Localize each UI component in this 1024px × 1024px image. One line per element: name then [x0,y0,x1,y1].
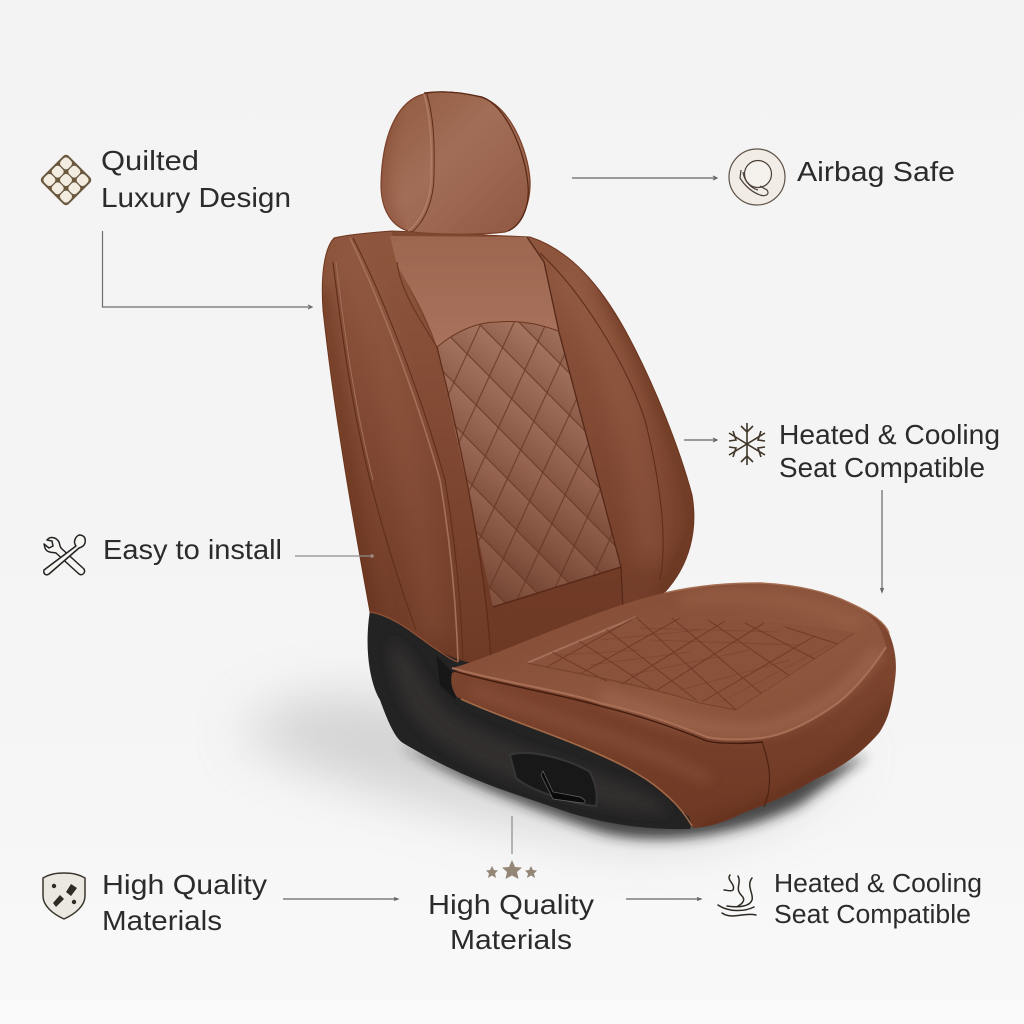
leader arrow [283,898,398,900]
icon: crossed tools [44,535,85,575]
diamond quilted back panel [437,321,620,608]
back stitching and piping [333,237,663,662]
seat adjustment lever [510,753,597,806]
callout: airbag safe [572,149,955,205]
label: Quilted [101,145,199,176]
callout: high quality materials centre [428,816,701,955]
vertical leader [511,816,513,854]
floor shadow [240,697,868,842]
icon: airbag [729,149,785,205]
leader arrow down [880,490,884,592]
centre panel [390,232,623,662]
icon: snowflake [729,423,765,465]
label: Luxury Design [101,182,291,213]
callout: easy to install [44,534,374,575]
leader arrow [572,176,717,180]
label [428,889,594,955]
cushion piping and seams [452,583,889,826]
icon: quilted diamond [39,153,93,207]
callout: high quality materials left [43,869,398,936]
leader line [102,231,312,309]
lower back hem over base [370,612,458,662]
cushion top surface [452,583,886,739]
label: High Quality [428,889,594,920]
label [102,869,267,936]
seat illustration [322,92,896,830]
label: Materials [102,905,222,936]
seat cushion [451,583,896,830]
label: High Quality [102,869,267,900]
infographic canvas [40,91,998,950]
callout: heated and cooling seat compatible [684,419,1000,592]
pointer line [295,554,374,558]
label: Heated & Cooling [774,870,982,898]
label: Heated & Cooling [779,419,1000,450]
leader arrow [684,438,717,442]
label: Seat Compatible [774,901,971,929]
headrest [381,92,530,235]
callout: quilted luxury design [39,145,312,309]
label [774,870,982,929]
label: Airbag Safe [797,156,955,187]
label: Easy to install [103,534,282,565]
black plastic seat base [368,605,700,829]
label [779,419,1000,483]
leader arrow [626,898,701,900]
seat back [322,231,694,663]
label: Materials [450,924,572,955]
label [101,145,291,213]
icon: stars [486,860,537,879]
label: Seat Compatible [779,452,985,483]
icon: heat waves [718,875,756,916]
quilted cushion panel [527,617,855,710]
icon: shield [43,873,85,919]
callout: heated and cooling seat compatible bottom [718,870,982,929]
